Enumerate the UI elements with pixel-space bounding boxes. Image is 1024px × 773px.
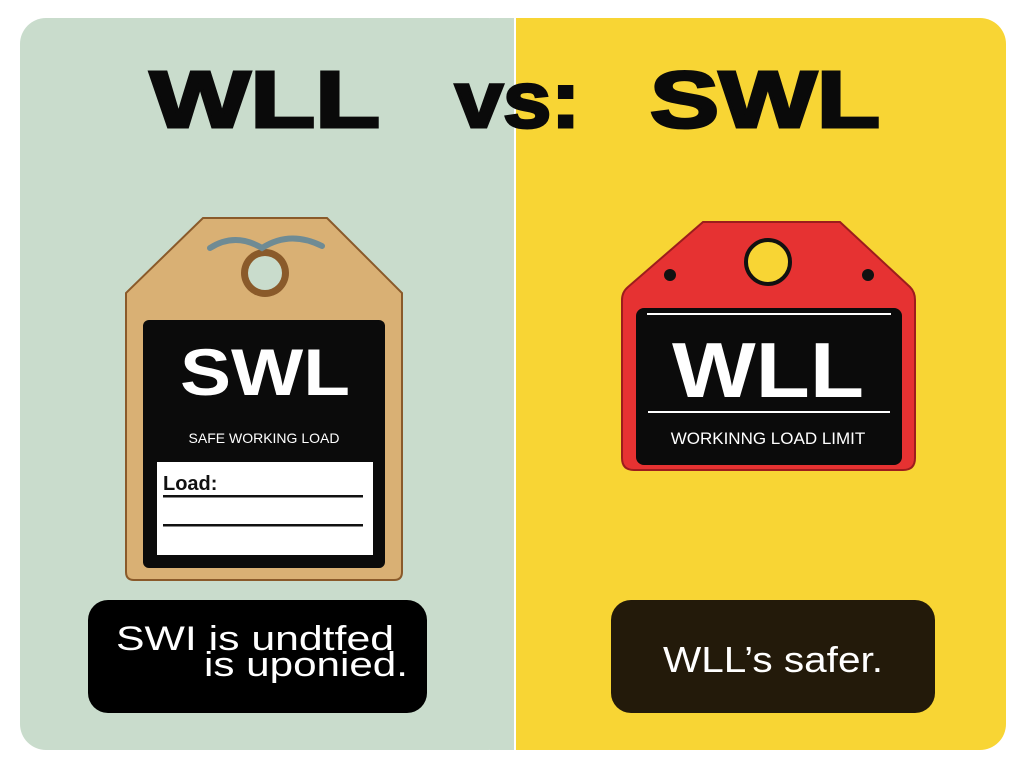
title: vs: (455, 55, 580, 144)
callout: left: SWI is undtfed (116, 620, 394, 658)
tag: SWL cardboard (126, 218, 402, 580)
callout: right (611, 600, 935, 713)
tag: SWL cardboard: Load: (163, 473, 217, 495)
title (150, 55, 880, 144)
black label (636, 308, 902, 465)
tag: WLL red: WLL (672, 326, 864, 414)
callout: right: WLL’s safer. (663, 639, 883, 680)
hole (241, 249, 289, 297)
panel: right background (516, 18, 1006, 750)
panel: left background (20, 18, 514, 750)
tag: SWL cardboard: SWL (180, 335, 350, 409)
tag: WLL red: WORKINNG LOAD LIMIT (671, 429, 865, 448)
callout: left: is uponied. (204, 646, 408, 684)
tag: WLL red (622, 222, 915, 470)
title: SWL (650, 55, 880, 144)
black label (143, 320, 385, 568)
white load box (157, 462, 373, 555)
callout: left (88, 600, 427, 713)
title: WLL (150, 55, 380, 144)
string (210, 238, 322, 248)
tag: SWL cardboard: SAFE WORKING LOAD (189, 430, 339, 446)
hole (746, 240, 790, 284)
